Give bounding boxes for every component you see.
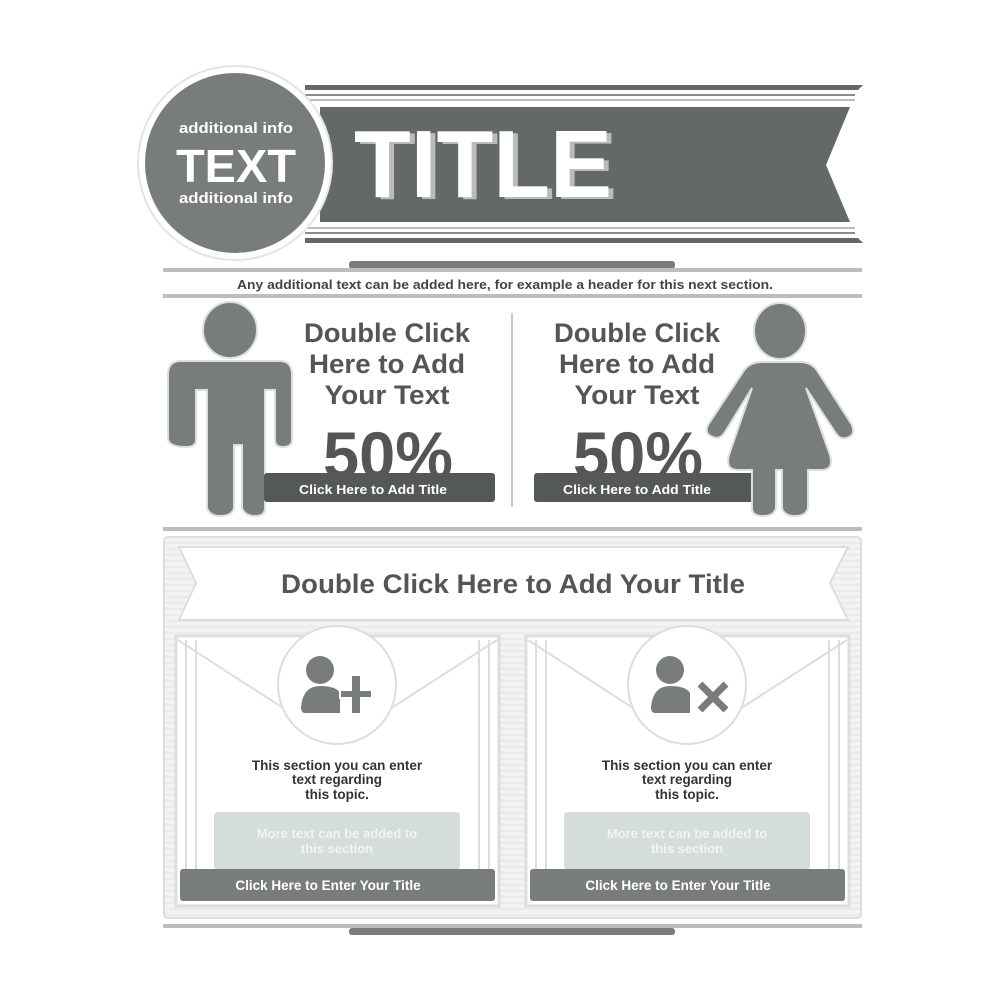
badge circle: additional info bbox=[179, 120, 293, 137]
card: remove user: Click Here to Enter Your Title bbox=[585, 878, 771, 893]
card: remove user: this topic. bbox=[655, 787, 719, 802]
badge circle: TEXT bbox=[176, 140, 296, 192]
card: add user bbox=[176, 626, 499, 906]
banner heading bbox=[179, 547, 848, 620]
badge circle bbox=[138, 66, 332, 260]
left text bbox=[304, 318, 471, 492]
badge circle: additional info bbox=[179, 190, 293, 207]
icon: man bbox=[168, 302, 292, 516]
right text: 50% bbox=[573, 418, 703, 492]
icon: woman bbox=[707, 303, 853, 516]
subheader text: Any additional text can be added here, for example a header for this next section. bbox=[237, 278, 773, 292]
right title bar: Click Here to Add Title bbox=[563, 482, 711, 497]
card: remove user: text regarding bbox=[642, 772, 732, 787]
card: add user: This section you can enter bbox=[252, 758, 423, 773]
left text: Double Click bbox=[304, 318, 471, 348]
card: add user: More text can be added to bbox=[257, 826, 417, 841]
right text: Here to Add bbox=[559, 349, 715, 379]
right text: Your Text bbox=[574, 380, 700, 410]
right title bar bbox=[534, 473, 754, 502]
card: remove user: this section bbox=[651, 841, 723, 856]
card: remove user: This section you can enter bbox=[602, 758, 773, 773]
left title bar bbox=[264, 473, 495, 502]
right text: Double Click bbox=[554, 318, 721, 348]
card: add user: Click Here to Enter Your Title bbox=[235, 878, 421, 893]
left text: 50% bbox=[323, 418, 453, 492]
left text: Your Text bbox=[324, 380, 450, 410]
title text: TITLE bbox=[354, 111, 612, 218]
banner heading: Double Click Here to Add Your Title bbox=[281, 569, 745, 599]
title text: TITLE bbox=[359, 113, 617, 220]
card: remove user: More text can be added to bbox=[607, 826, 767, 841]
icon: user remove bbox=[651, 656, 726, 713]
card: add user: text regarding bbox=[292, 772, 382, 787]
left text: Here to Add bbox=[309, 349, 465, 379]
left title bar: Click Here to Add Title bbox=[299, 482, 447, 497]
right text bbox=[554, 318, 721, 492]
card: remove user bbox=[526, 626, 849, 906]
panel: bottom section bbox=[164, 537, 861, 918]
title ribbon bbox=[305, 85, 863, 243]
icon: user plus bbox=[301, 656, 372, 713]
card: add user: this section bbox=[301, 841, 373, 856]
card: add user: this topic. bbox=[305, 787, 369, 802]
